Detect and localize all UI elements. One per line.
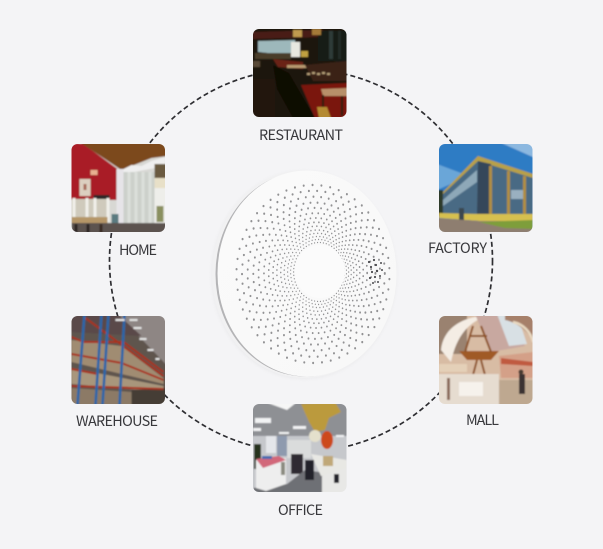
- label: restaurant: RESTAURANT: [259, 124, 343, 145]
- photo: mall: [437, 314, 535, 407]
- device shadow: [212, 171, 396, 379]
- centre button: [295, 245, 345, 298]
- speaker holes: [368, 259, 383, 284]
- label: office: OFFICE: [278, 499, 323, 520]
- infographic canvas: [72, 29, 532, 515]
- device rim: [212, 170, 397, 378]
- photo: factory: [437, 142, 535, 235]
- label: warehouse: WAREHOUSE: [76, 410, 158, 431]
- label: factory: FACTORY: [428, 237, 487, 258]
- photo: home: [70, 142, 168, 235]
- vent dot rings: [236, 185, 390, 363]
- device face: [218, 170, 396, 376]
- smoke alarm device: [212, 170, 397, 379]
- photo: restaurant: [251, 27, 349, 120]
- photo: warehouse: [70, 314, 168, 407]
- dashed connecting ring: [110, 69, 492, 452]
- photo: office: [251, 402, 349, 495]
- label: mall: MALL: [466, 409, 499, 430]
- label: home: HOME: [119, 239, 157, 260]
